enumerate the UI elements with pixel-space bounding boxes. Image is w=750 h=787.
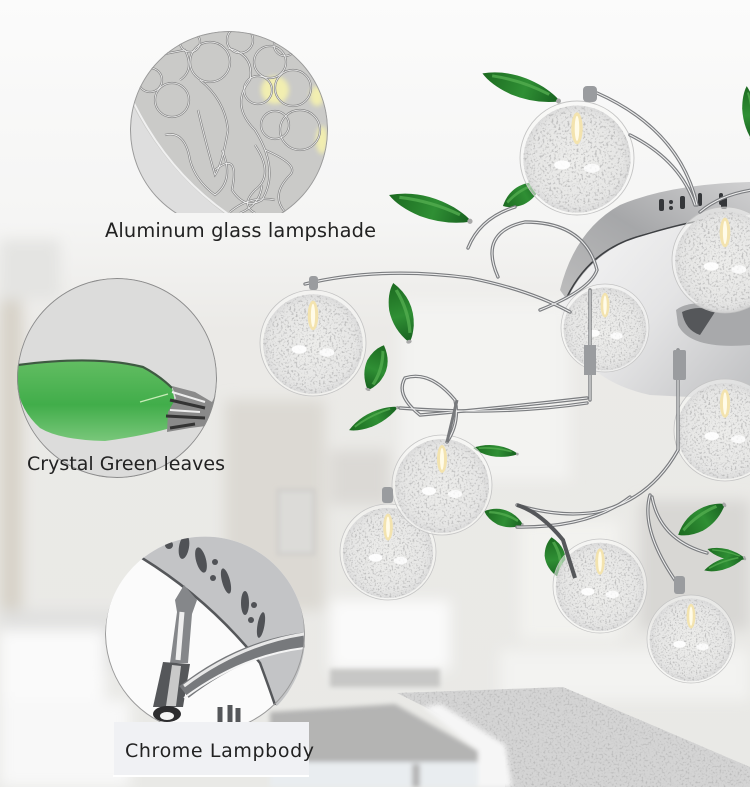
ceiling plate: [560, 182, 750, 400]
rim vents: [659, 193, 727, 211]
carpet: [397, 687, 750, 787]
glass table: [270, 669, 512, 787]
heading: chrome lampbody: Chrome Lampbody: [125, 740, 314, 762]
chandelier product: [260, 64, 750, 683]
panel: aluminum glass lampshade: [105, 27, 376, 242]
panel: crystal green leaves: [17, 278, 225, 478]
heading: aluminum glass lampshade: Aluminum glass lampshade: [105, 219, 376, 242]
center hub: [676, 302, 750, 346]
heading: crystal green leaves: Crystal Green leaves: [27, 453, 225, 475]
panel: chrome lampbody: [105, 525, 314, 777]
chrome arms: [305, 93, 750, 583]
detail photo: aluminum mesh: [130, 27, 328, 229]
glass globes: [260, 101, 750, 683]
label band: [114, 722, 309, 776]
detail photo: green leaf: [17, 278, 217, 478]
framed picture: [278, 490, 314, 554]
underline: [113, 775, 309, 777]
lamp sockets: [309, 86, 686, 594]
detail photo: chrome body: [105, 536, 305, 722]
leaves behind globes: [346, 64, 750, 580]
